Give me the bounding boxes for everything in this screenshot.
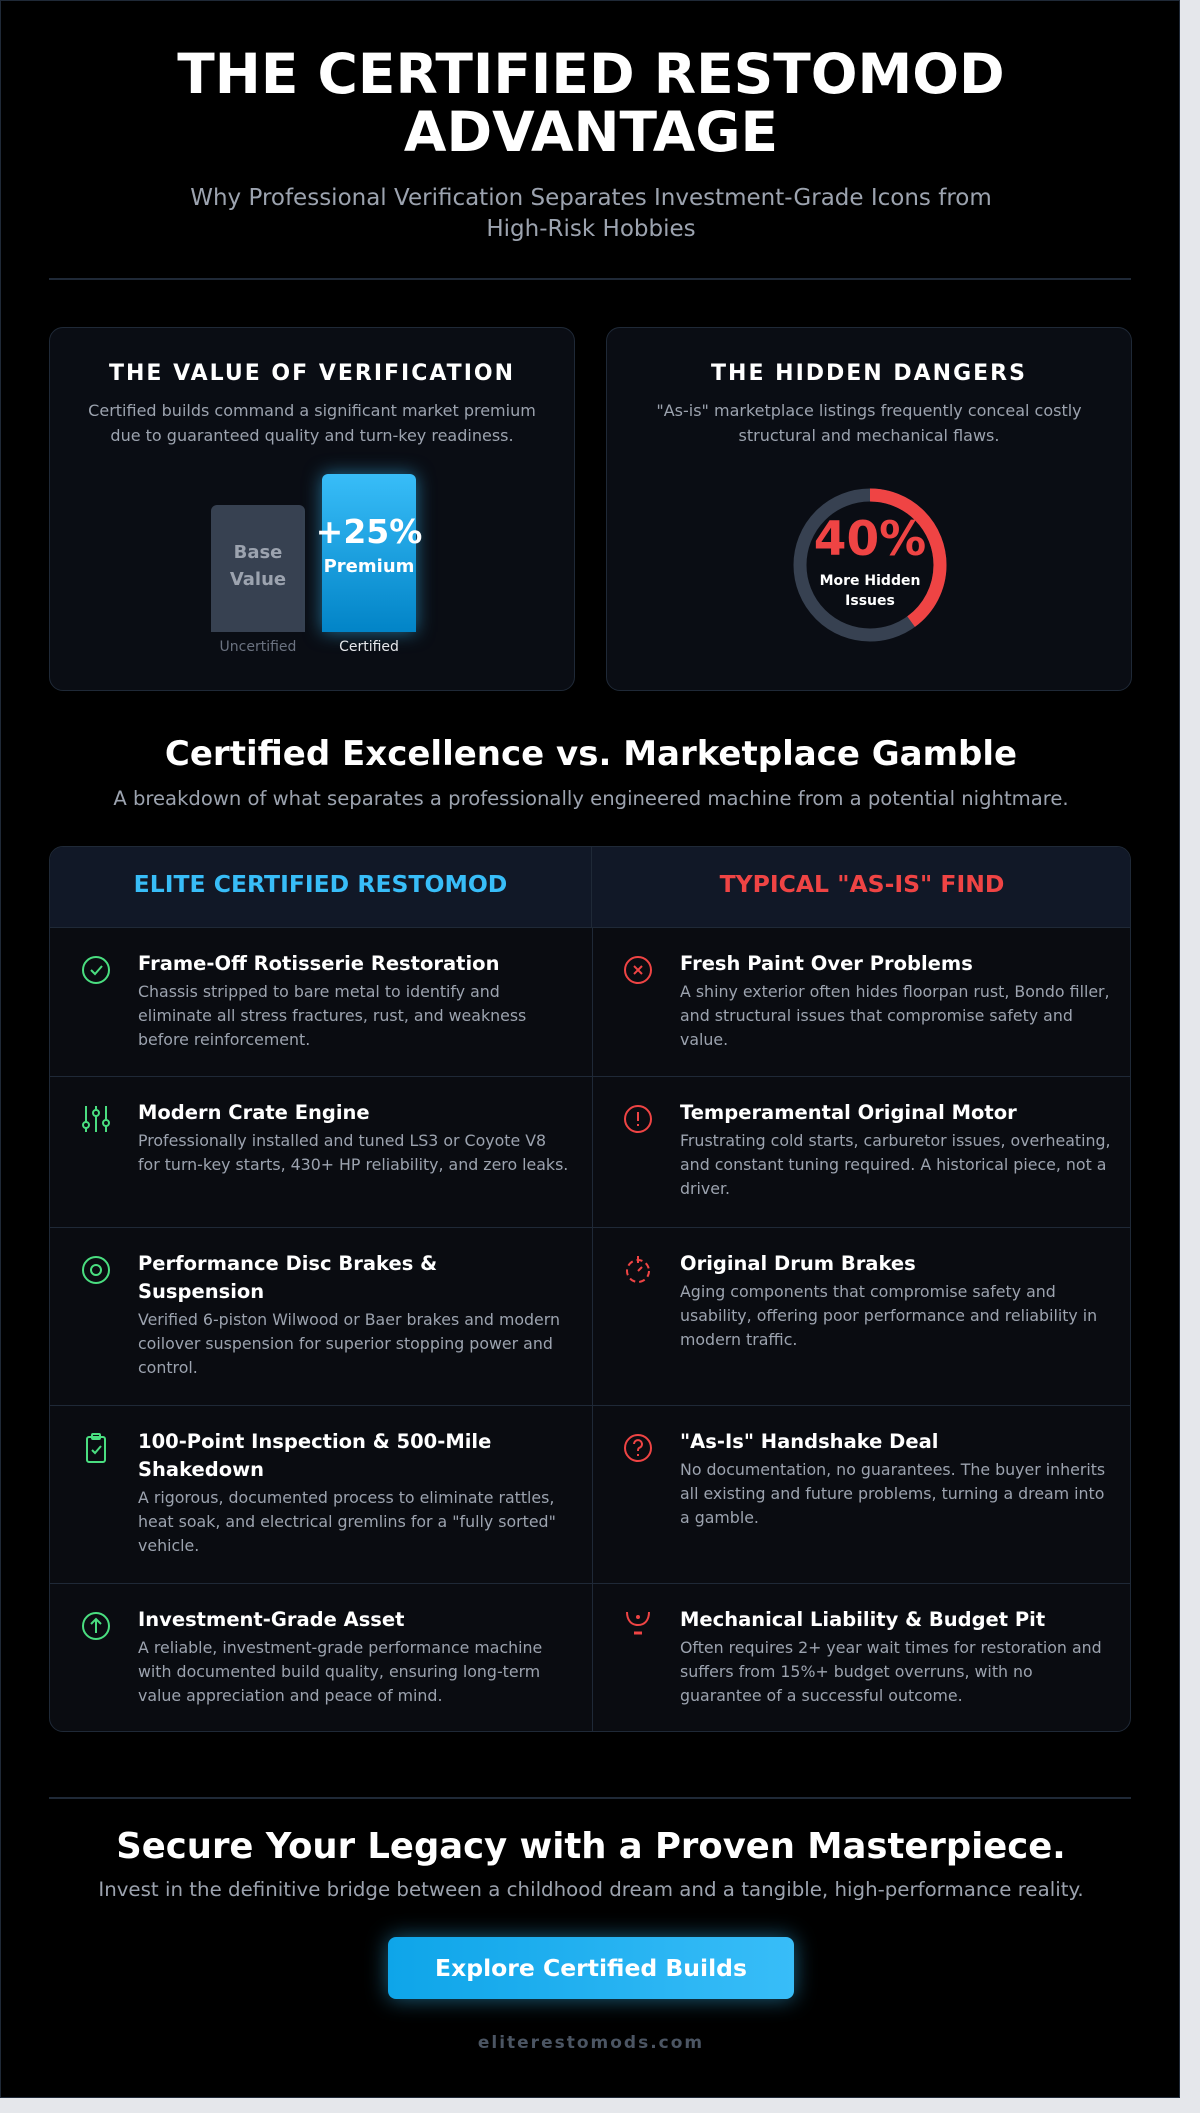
bar: certified	[322, 474, 416, 632]
icon: alert	[624, 1105, 652, 1133]
row 1 right	[592, 927, 1132, 1076]
item: disc brakes: Performance Disc Brakes & Suspension	[138, 1252, 437, 1303]
CTA button: Explore Certified Builds	[435, 1954, 747, 1982]
icon: x	[624, 956, 652, 984]
row 5 left	[50, 1583, 592, 1733]
bar: uncertified: Base	[234, 542, 282, 563]
item: fresh paint	[680, 952, 1110, 1049]
item: handshake deal: No documentation, no guarantees. The buyer inherits all existing and future problems, turning a dream into a gamble.	[680, 1460, 1105, 1527]
row 4 left	[50, 1405, 592, 1583]
header: elite certified	[50, 847, 592, 927]
item: inspection: A rigorous, documented process to eliminate rattles, heat soak, and electrical gremlins for a "fully sorted" vehicle.	[138, 1488, 556, 1555]
item: budget pit	[680, 1608, 1102, 1705]
item: fresh paint: A shiny exterior often hides floorpan rust, Bondo filler, and structural issues that compromise safety and value.	[680, 982, 1110, 1049]
item: inspection	[138, 1430, 556, 1555]
row 2 right	[592, 1076, 1132, 1227]
icon: arrow up	[82, 1612, 110, 1640]
label: uncertified: Uncertified	[220, 639, 296, 655]
row 3 right	[592, 1227, 1132, 1405]
text: value description: Certified builds command a significant market premium due to guaranteed quality and turn-key readiness.	[88, 401, 536, 445]
CTA heading: Secure Your Legacy with a Proven Masterpiece.	[116, 1826, 1066, 1867]
label: certified: Certified	[339, 639, 399, 655]
panel: hidden dangers	[606, 327, 1132, 691]
bar: uncertified	[211, 505, 305, 632]
item: original motor: Temperamental Original Motor	[680, 1101, 1017, 1124]
item: drum brakes: Original Drum Brakes	[680, 1252, 916, 1275]
title: ADVANTAGE	[404, 100, 778, 164]
icon: drum	[626, 1256, 650, 1283]
item: fresh paint: Fresh Paint Over Problems	[680, 952, 973, 975]
item: disc brakes: Verified 6-piston Wilwood or Baer brakes and modern coilover suspension for superior stopping power and control.	[138, 1310, 560, 1377]
item: original motor: Frustrating cold starts, carburetor issues, overheating, and constant tuning required. A historical piece, not a driver.	[680, 1131, 1111, 1198]
bar chart	[211, 461, 429, 655]
donut chart	[794, 488, 946, 642]
item: investment asset	[138, 1608, 542, 1705]
comparison table	[49, 846, 1131, 1732]
row 5 right	[592, 1583, 1132, 1733]
label: more hidden issues	[820, 573, 920, 609]
item: handshake deal: "As-Is" Handshake Deal	[680, 1430, 938, 1453]
footer url: eliterestomods.com	[478, 2033, 704, 2053]
item: drum brakes: Aging components that compromise safety and usability, offering poor performance and reliability in modern traffic.	[680, 1282, 1097, 1349]
text: dangers description: "As-is" marketplace listings frequently conceal costly structural and mechanical flaws.	[656, 401, 1082, 445]
item: budget pit: Often requires 2+ year wait times for restoration and suffers from 15%+ budget overruns, with no guarantee of a successful outcome.	[680, 1638, 1102, 1705]
item: handshake deal	[680, 1430, 1105, 1527]
header: typical as-is: TYPICAL "AS-IS" FIND	[720, 870, 1004, 898]
panel: value of verification	[49, 327, 575, 691]
item: crate engine: Modern Crate Engine	[138, 1101, 370, 1124]
icon: pit	[626, 1612, 650, 1634]
item: investment asset: A reliable, investment-grade performance machine with documented build quality, ensuring long-term value appreciation and peace of mind.	[138, 1638, 542, 1705]
item: frame-off: Frame-Off Rotisserie Restoration	[138, 952, 499, 975]
CTA subtitle: Invest in the definitive bridge between a childhood dream and a tangible, high-performance reality.	[98, 1878, 1084, 1901]
bar: certified: +25%	[316, 512, 422, 551]
row 3 left	[50, 1227, 592, 1405]
title: THE CERTIFIED RESTOMOD	[177, 42, 1005, 106]
CTA button	[388, 1937, 794, 1999]
item: frame-off: Chassis stripped to bare metal to identify and eliminate all stress fractures, rust, and weakness before reinforcement.	[138, 982, 526, 1049]
label: more hidden issues: More Hidden	[820, 573, 920, 589]
icon: check	[82, 956, 110, 984]
label: more hidden issues: Issues	[845, 593, 895, 609]
header: elite certified: ELITE CERTIFIED RESTOMOD	[134, 870, 507, 898]
item: investment asset: Investment-Grade Asset	[138, 1608, 404, 1631]
item: original motor	[680, 1101, 1111, 1198]
item: frame-off	[138, 952, 526, 1049]
bar: uncertified: Value	[230, 569, 286, 590]
item: drum brakes	[680, 1252, 1097, 1349]
bar: certified: Premium	[324, 556, 414, 577]
row 4 right	[592, 1405, 1132, 1583]
item: budget pit: Mechanical Liability & Budget Pit	[680, 1608, 1045, 1631]
row 1 left	[50, 927, 592, 1076]
icon: sliders	[82, 1106, 110, 1132]
heading: value of verification: THE VALUE OF VERIFICATION	[109, 361, 515, 386]
title	[177, 42, 1005, 164]
row 2 left	[50, 1076, 592, 1227]
icon: question	[624, 1434, 652, 1462]
stat: 40%: 40%	[814, 512, 926, 567]
section subtitle: A breakdown of what separates a professionally engineered machine from a potential nightmare.	[113, 787, 1069, 810]
header: typical as-is	[592, 847, 1132, 927]
item: inspection: 100-Point Inspection & 500-Mile Shakedown	[138, 1430, 491, 1481]
heading: hidden dangers: THE HIDDEN DANGERS	[711, 361, 1027, 386]
item: crate engine: Professionally installed and tuned LS3 or Coyote V8 for turn-key starts, 430+ HP reliability, and zero leaks.	[138, 1131, 568, 1174]
section heading: Certified Excellence vs. Marketplace Gamble	[165, 734, 1017, 774]
icon: clipboard	[86, 1433, 106, 1463]
subtitle: Why Professional Verification Separates Investment-Grade Icons from High-Risk Hobbies	[190, 185, 992, 242]
item: crate engine	[138, 1101, 568, 1174]
icon: disc	[82, 1256, 110, 1284]
item: disc brakes	[138, 1252, 560, 1377]
